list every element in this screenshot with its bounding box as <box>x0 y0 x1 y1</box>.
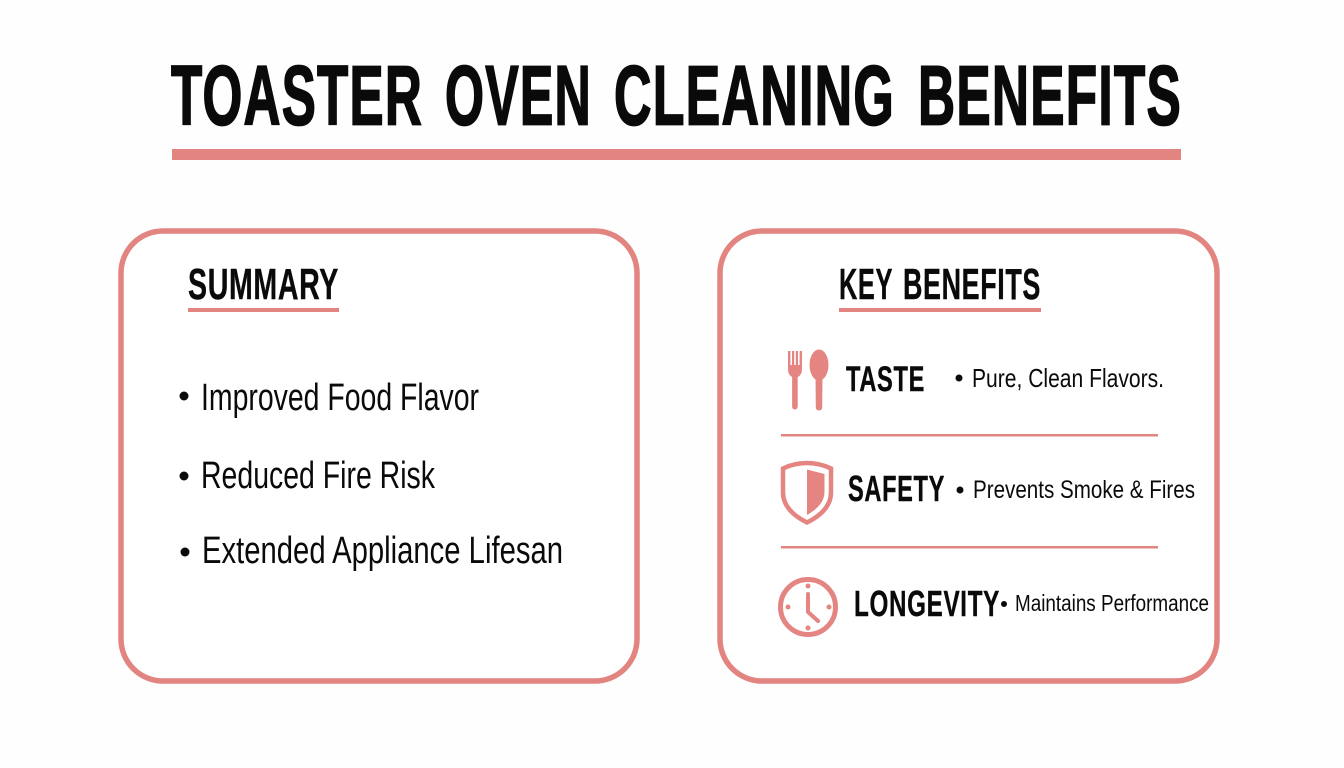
title <box>171 48 1182 160</box>
panel: key benefits <box>720 231 1217 681</box>
icon: clock <box>780 580 836 634</box>
description: longevity: Maintains Performance <box>1015 590 1209 616</box>
row: longevity <box>780 580 1209 634</box>
icon: shield <box>783 463 831 522</box>
title: TOASTER <box>171 48 423 142</box>
label: safety: SAFETY <box>848 468 945 509</box>
row: safety <box>783 463 1195 522</box>
title: BENEFITS <box>918 48 1182 142</box>
heading: key benefits: BENEFITS <box>903 260 1041 309</box>
title: CLEANING <box>614 48 895 142</box>
label: taste: TASTE <box>846 360 925 399</box>
heading: summary: SUMMARY <box>188 260 339 309</box>
panel: summary <box>121 231 637 681</box>
heading: key benefits <box>839 260 1041 312</box>
row: taste <box>788 350 1164 410</box>
bullet: reduced fire risk: Reduced Fire Risk <box>201 455 436 497</box>
heading: summary <box>188 260 339 312</box>
icon: fork and spoon <box>788 350 828 410</box>
description: safety: Prevents Smoke & Fires <box>973 476 1195 504</box>
label: longevity: LONGEVITY <box>854 583 1000 624</box>
title: OVEN <box>445 48 592 142</box>
description: taste: Pure, Clean Flavors. <box>972 363 1164 393</box>
bullet: improved food flavor: Improved Food Flavor <box>201 377 479 419</box>
heading: key benefits: KEY <box>839 260 893 309</box>
bullet: extended appliance lifesan: Extended Appliance Lifesan <box>202 530 563 572</box>
